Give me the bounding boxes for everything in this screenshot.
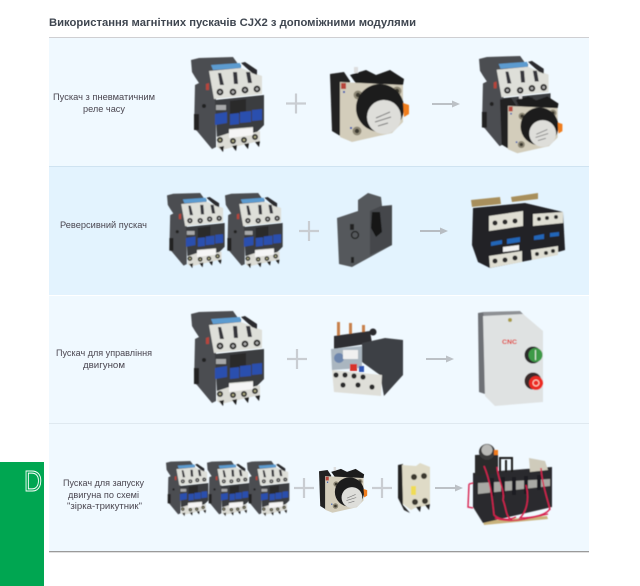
icon: plus [286, 94, 306, 114]
label: row 1: Пускач з пневматичним [53, 92, 155, 103]
icon: enclosed starter with buttons [478, 311, 543, 406]
icon: plus [299, 221, 319, 241]
icon: reversing contactor assembly [471, 193, 565, 268]
label: row 1: реле часу [83, 104, 125, 115]
icon: three contactors [166, 461, 289, 516]
panel: row 4, star-delta starter [49, 424, 589, 552]
brand mark: CNC [502, 340, 518, 346]
arrow [435, 484, 463, 492]
icon: plus [287, 349, 307, 369]
label: row 2: Реверсивний пускач [60, 220, 147, 231]
panel: row 2, reversing starter [49, 167, 589, 295]
icon: plus [294, 478, 314, 498]
icon: star-delta assembly [468, 444, 552, 525]
arrow [432, 100, 460, 108]
panel: row 3, motor control starter [49, 296, 589, 424]
side tab: section D [0, 462, 44, 586]
side tab: section D: D [24, 466, 42, 498]
icon: mechanical interlock [337, 193, 392, 267]
title: Використання магнітних пускачів CJX2 з допоміжними модулями [49, 17, 416, 29]
icon: timer module [330, 67, 409, 142]
icon: contactor [191, 311, 264, 406]
arrow [426, 356, 454, 362]
panel: row 1, pneumatic timer starter [49, 38, 589, 167]
icon: red button [524, 372, 543, 390]
label: row 3: Пускач для управління [56, 348, 152, 359]
arrow [420, 228, 448, 234]
icon: contactor with timer module [479, 56, 562, 153]
icon: auxiliary contact block [398, 463, 430, 513]
icon: thermal relay [331, 322, 403, 396]
icon: two contactors [167, 193, 283, 268]
label: row 4: "зірка-трикутник" [67, 501, 142, 512]
icon: plus [372, 478, 392, 498]
label: row 3: двигуном [83, 360, 125, 371]
label: row 4: двигуна по схемі [68, 490, 139, 501]
icon: green button [524, 346, 542, 364]
icon: timer module [319, 467, 367, 513]
label: row 4: Пускач для запуску [63, 478, 144, 489]
icon: contactor [191, 57, 264, 152]
